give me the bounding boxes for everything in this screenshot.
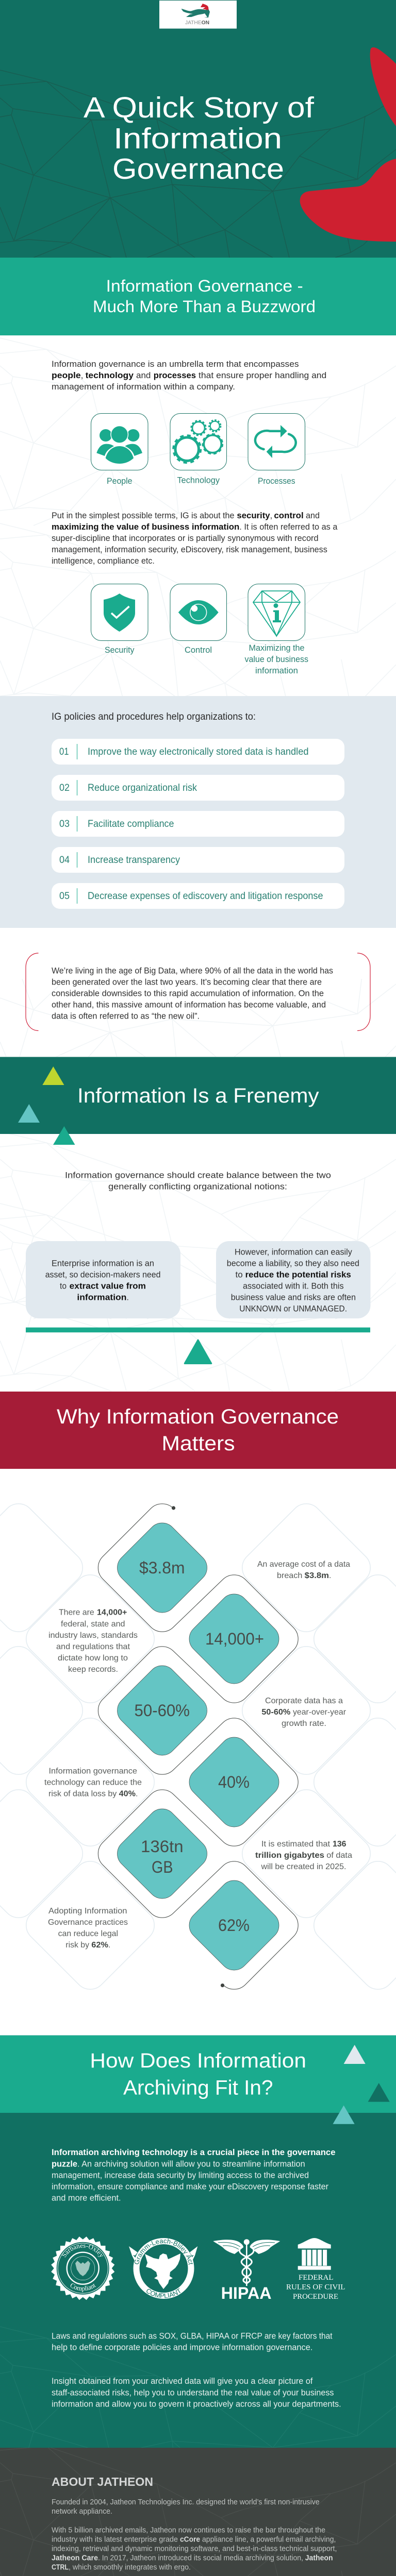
illustration: red fox snout [300, 159, 396, 242]
label: technology: Technology [177, 476, 220, 485]
list item 02: Reduce organizational risk [88, 783, 197, 793]
logo: Sarbanes-Oxley compliant: Compliant [70, 2283, 96, 2292]
icon: pale triangle [344, 2045, 366, 2064]
text block: laws and regulations: Laws and regulations such as SOX, GLBA, HIPAA or FRCP are key factors that [52, 2332, 333, 2341]
icon card: maximizing value [244, 584, 308, 675]
text block: insight from archived data: staff-associated risks, help you to understand the real value of your business [52, 2388, 334, 2398]
title: Governance [112, 152, 284, 185]
stat diamond: 136tn GB [111, 1803, 213, 1905]
heading: much more than a buzzword: Much More Than a Buzzword [93, 297, 316, 316]
pale diamond lattice [0, 1497, 396, 1996]
note: cost of a data breach: $3.8m [305, 1571, 329, 1580]
stat diamond: 40% [183, 1731, 285, 1833]
text block: umbrella term intro: technology [86, 371, 134, 380]
label: maximizing the value of business information [244, 643, 308, 675]
note: data growth rate: 50-60% [261, 1708, 290, 1717]
text block: archiving is a crucial piece [52, 2148, 335, 2203]
note: 136 trillion gigabytes: It is estimated that [261, 1840, 331, 1849]
text block: products [52, 2527, 337, 2572]
stat diamond: 14,000+: 14,000+ [205, 1630, 264, 1648]
note: 136 trillion gigabytes: of data [326, 1851, 352, 1860]
label: control: Control [185, 646, 212, 655]
text block: products: Jatheon Care [52, 2554, 98, 2563]
panel: header cover [0, 0, 396, 258]
text block: archiving is a crucial piece: and more efficient. [52, 2194, 121, 2203]
note: 14,000+ laws: and regulations that [56, 1642, 130, 1651]
text block: security, control, value: maximizing the value of business information [52, 522, 239, 532]
icon card: people [91, 413, 148, 486]
list item 03: 03 [59, 819, 70, 829]
label: maximizing the value of business information: value of business [244, 655, 308, 664]
icon card: processes [248, 413, 305, 486]
text block: founded [52, 2498, 320, 2516]
heading: why information governance matters: Why Information Governance [57, 1405, 339, 1428]
text block: archiving is a crucial piece: management, increase data security by limiting access to the archived [52, 2171, 309, 2180]
note: reduce data loss risk: technology can reduce the [44, 1778, 142, 1787]
text block: balance intro: Information governance should create balance between the two [65, 1171, 331, 1180]
note: reduce legal risk: risk by [65, 1941, 89, 1950]
stat diamond: 62%: 62% [218, 1916, 250, 1935]
logo: HIPAA caduceus [213, 2239, 280, 2302]
text block: balance intro: generally conflicting organizational notions: [108, 1182, 287, 1191]
text block: umbrella term intro: management of information within a company. [52, 382, 235, 392]
stat diamond: 136tn GB: GB [152, 1858, 173, 1876]
text block: products: industry with its latest enterprise grade [52, 2536, 178, 2544]
heading: IG policies: IG policies and procedures help organizations to: [52, 711, 256, 722]
note: reduce legal risk: Governance practices [48, 1918, 128, 1927]
text block: umbrella term intro: that ensure proper handling and [199, 371, 326, 380]
heading: information is a frenemy: Information Is a Frenemy [77, 1084, 319, 1107]
logo: federal rules of civil procedure [286, 2238, 345, 2301]
card: extract value: asset, so decision-makers need [45, 1270, 161, 1279]
heading: why information governance matters [57, 1405, 339, 1455]
list item 01 [52, 739, 344, 765]
text block: security, control, value: control [274, 511, 304, 520]
list item 02: 02 [59, 783, 70, 793]
text block: security, control, value: super-discipline that incorporates or is partially synonymous with record [52, 534, 319, 543]
heading: how does information archiving fit in: How Does Information [90, 2049, 306, 2072]
icon card: technology [170, 413, 227, 485]
text block: umbrella term intro: Information governance is an umbrella term that encompasses [52, 360, 299, 369]
decorative mesh lines on the header [0, 70, 396, 258]
text block: umbrella term intro: , [81, 371, 83, 380]
card: extract value: extract value from [70, 1281, 146, 1291]
stat diamond: $3.8m [111, 1517, 213, 1619]
text block: balance intro [65, 1171, 331, 1191]
note: reduce legal risk [48, 1907, 128, 1950]
logo: federal rules of civil procedure: PROCEDURE [293, 2293, 338, 2301]
callout: big data quote: other hand, this massive amount of information has become valuable, and [52, 1001, 326, 1010]
stat diamond: 50-60% [111, 1659, 213, 1761]
logo: Gramm-Leach-Bliley compliant: COMPLIANT [146, 2288, 180, 2298]
label: maximizing the value of business information: Maximizing the [249, 643, 304, 653]
text block: security, control, value: security [237, 511, 270, 520]
label: maximizing the value of business information: information [255, 666, 298, 675]
list item 05: 05 [59, 891, 70, 902]
text block: laws and regulations: help to define corporate policies and improve information governance. [52, 2343, 312, 2352]
note: 14,000+ laws: keep records. [68, 1665, 118, 1674]
list item 01: Improve the way electronically stored data is handled [88, 747, 308, 757]
card: extract value: Enterprise information is an [52, 1259, 154, 1268]
text block: umbrella term intro [52, 360, 326, 392]
note: data growth rate [261, 1697, 346, 1728]
note: 14,000+ laws: 14,000+ [97, 1608, 127, 1617]
balance fulcrum [185, 1340, 211, 1363]
text block: products: . In 2017, Jatheon introduced its social media archiving solution, [98, 2554, 303, 2563]
card: reduce risks: become a liability, so they also need [227, 1259, 359, 1268]
text block: archiving is a crucial piece: Information archiving technology is a crucial piece in the governance [52, 2148, 335, 2157]
note: reduce legal risk: . [108, 1941, 110, 1950]
stat diamond: 50-60%: 50-60% [134, 1701, 190, 1720]
heading: much more than a buzzword [93, 277, 316, 316]
text block: insight from archived data [52, 2377, 341, 2409]
decorative mesh lines on the archiving section [0, 2327, 396, 2448]
note: data growth rate: Corporate data has a [265, 1697, 343, 1705]
text block: umbrella term intro: processes [154, 371, 196, 380]
card: extract value: . [126, 1293, 129, 1302]
panel: subtitle band [0, 258, 396, 335]
stat diamond: $3.8m: $3.8m [139, 1558, 185, 1577]
text block: products: cCore [180, 2536, 200, 2544]
list item 01: 01 [59, 747, 69, 757]
text block: insight from archived data: information and allow you to govern it proactively across all your departments. [52, 2400, 341, 2409]
icon card: security [91, 584, 148, 655]
text block: products: , which smoothly integrates with ergo. [69, 2564, 191, 2572]
note: data growth rate: growth rate. [282, 1719, 326, 1728]
panel: about Jatheon [0, 2435, 396, 2576]
card: reduce risks [216, 1241, 370, 1318]
note: 14,000+ laws: dictate how long to [58, 1654, 128, 1663]
icon: aqua triangle [18, 1104, 40, 1123]
logo: Jatheon [159, 1, 237, 29]
text block: security, control, value: Put in the simplest possible terms, IG is about the [52, 511, 234, 520]
text block: products: appliance line, a powerful email archiving, [202, 2536, 336, 2544]
text block: security, control, value: , [270, 511, 272, 520]
logo: federal rules of civil procedure: RULES OF CIVIL [286, 2283, 345, 2292]
note: 14,000+ laws: industry laws, standards [48, 1631, 138, 1640]
note: cost of a data breach [257, 1560, 350, 1580]
logo: HIPAA caduceus: HIPAA [221, 2284, 272, 2302]
list item 04 [52, 847, 344, 873]
icon: dark triangle [368, 2083, 390, 2102]
illustration: red fox ear [370, 47, 396, 126]
card: reduce risks: to [235, 1270, 243, 1279]
stat diamond: 136tn GB: 136tn [141, 1837, 184, 1856]
note: reduce data loss risk: . [136, 1790, 138, 1798]
text block: founded: network appliance. [52, 2507, 112, 2516]
text block: products: indexing, retrieval and dynamic monitoring software, and best-in-class technical support, [52, 2545, 337, 2553]
callout: big data quote: been generated over the last two years. It’s becoming clear that there are [52, 977, 322, 987]
icon: teal triangle [53, 1126, 75, 1145]
list item 04: Increase transparency [88, 855, 180, 866]
text block: security, control, value: intelligence, compliance etc. [52, 556, 155, 566]
note: cost of a data breach: An average cost of a data [257, 1560, 350, 1569]
note: reduce legal risk: Adopting Information [48, 1907, 127, 1916]
card: reduce risks: reduce the potential risks [245, 1270, 351, 1279]
heading: how does information archiving fit in: Archiving Fit In? [123, 2076, 273, 2099]
stat diamond: 62% [183, 1874, 285, 1976]
text block: products: CTRL [52, 2564, 69, 2572]
text block: security, control, value [52, 511, 338, 566]
panel: frenemy heading band [0, 1057, 396, 1145]
note: cost of a data breach: . [329, 1571, 331, 1580]
panel: why IG matters heading band [0, 1392, 396, 1469]
list item 05 [52, 883, 344, 909]
heading: much more than a buzzword: Information Governance - [106, 277, 303, 295]
text block: umbrella term intro: people [52, 371, 81, 380]
list item 02 [52, 775, 344, 801]
heading: how does information archiving fit in [90, 2049, 306, 2099]
text block: archiving is a crucial piece: information, ensure compliance and make your eDiscovery response faster [52, 2182, 328, 2192]
logo: Gramm-Leach-Bliley compliant: Gramm-Leach-Bliley Act [134, 2239, 193, 2265]
panel: archiving section [0, 2035, 396, 2448]
label: processes: Processes [258, 477, 295, 486]
title: A Quick Story of [84, 91, 314, 124]
note: data growth rate: year-over-year [293, 1708, 346, 1717]
balance beam [26, 1328, 370, 1332]
card: reduce risks: However, information can easily [235, 1248, 353, 1257]
note: 136 trillion gigabytes: will be created in 2025. [260, 1862, 346, 1871]
callout: big data quote: considerable downsides to this rapid accumulation of information. On the [52, 989, 324, 998]
decorative mesh lines on the footer [0, 2435, 396, 2576]
text block: umbrella term intro: and [136, 371, 151, 380]
text block: insight from archived data: Insight obtained from your archived data will give you a clear picture of [52, 2377, 313, 2386]
logo: federal rules of civil procedure: FEDERAL [299, 2274, 333, 2282]
list item 05: Decrease expenses of ediscovery and litigation response [88, 891, 323, 902]
note: reduce data loss risk [44, 1767, 142, 1798]
icon card: control [170, 584, 227, 655]
logo: Sarbanes-Oxley compliant [51, 2236, 114, 2300]
text block: laws and regulations [52, 2332, 333, 2352]
note: reduce data loss risk: 40% [119, 1790, 136, 1798]
note: 14,000+ laws: There are [59, 1608, 94, 1617]
list item 04: 04 [59, 855, 70, 866]
serpentine connector line [98, 1504, 298, 1989]
text block: archiving is a crucial piece: . An archiving solution will allow you to streamline information [77, 2160, 305, 2169]
card: reduce risks: associated with it. Both this [243, 1281, 344, 1291]
text block: security, control, value: . It is often referred to as a [239, 522, 338, 532]
logo: Sarbanes-Oxley compliant: Sarbanes-Oxley [62, 2244, 103, 2258]
stat diamond: 14,000+ [183, 1588, 285, 1690]
note: 14,000+ laws: federal, state and [61, 1620, 125, 1629]
label: people: People [107, 477, 132, 486]
card: reduce risks: business value and risks are often [231, 1293, 356, 1302]
logo: Gramm-Leach-Bliley compliant [129, 2238, 198, 2299]
icon: aqua triangle [333, 2105, 355, 2124]
text block: archiving is a crucial piece: puzzle [52, 2160, 77, 2169]
note: reduce data loss risk: Information governance [48, 1767, 137, 1775]
callout: big data quote: data is often referred to as “the new oil”. [52, 1012, 200, 1021]
logo: Jatheon: JATHEON [185, 20, 209, 26]
stat diamond: 40%: 40% [218, 1773, 250, 1791]
note: reduce data loss risk: risk of data loss by [48, 1790, 117, 1798]
icon: lime triangle [42, 1066, 64, 1085]
text block: products: Jatheon [305, 2554, 333, 2563]
label: security: Security [105, 646, 135, 655]
heading: why information governance matters: Matters [162, 1432, 235, 1455]
card: extract value: information [77, 1293, 126, 1302]
panel: IG policies [0, 696, 396, 928]
note: cost of a data breach: breach [277, 1571, 302, 1580]
callout: big data quote [26, 953, 370, 1030]
note: reduce legal risk: can reduce legal [58, 1929, 118, 1938]
note: 136 trillion gigabytes: trillion gigabytes [255, 1851, 324, 1860]
list item 03 [52, 811, 344, 837]
text block: products: With 5 billion archived emails, Jatheon now continues to raise the bar throughout the [52, 2527, 325, 2535]
text block: security, control, value: management, information security, eDiscovery, risk management, business [52, 545, 327, 554]
note: 136 trillion gigabytes [255, 1840, 352, 1871]
background mesh on white sections [0, 338, 396, 1391]
title [84, 91, 314, 185]
text block: founded: Founded in 2004, Jatheon Technologies Inc. designed the world’s first non-intrusive [52, 2498, 320, 2506]
callout: big data quote: We’re living in the age of Big Data, where 90% of all the data in the world has [52, 967, 333, 976]
card: reduce risks: UNKNOWN or UNMANAGED. [239, 1304, 347, 1313]
note: reduce legal risk: 62% [91, 1941, 108, 1950]
card: extract value [26, 1241, 180, 1318]
note: 136 trillion gigabytes: 136 [333, 1840, 346, 1849]
list item 03: Facilitate compliance [88, 819, 174, 829]
heading: about jatheon: ABOUT JATHEON [52, 2475, 153, 2488]
text block: security, control, value: and [306, 511, 320, 520]
title: Information [113, 122, 282, 155]
card: extract value: to [60, 1281, 67, 1291]
note: 14,000+ laws [48, 1608, 138, 1674]
